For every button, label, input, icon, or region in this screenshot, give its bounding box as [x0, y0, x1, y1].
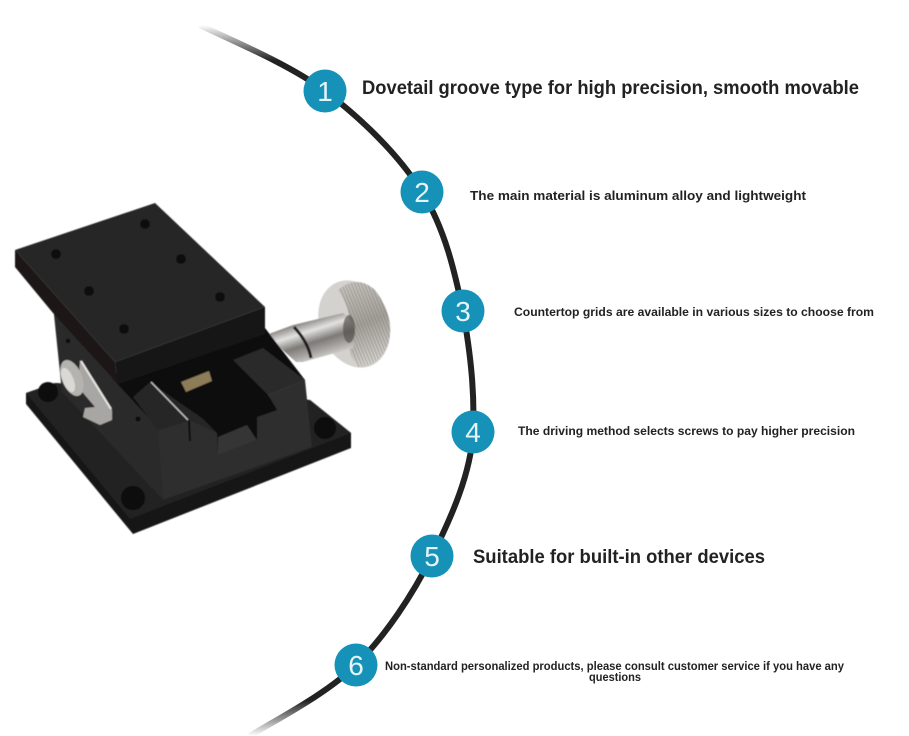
carriage block	[53, 305, 312, 500]
feature 1 text: Dovetail groove type for high precision, smooth movable	[362, 78, 859, 99]
marker 6	[334, 644, 378, 686]
left side face	[53, 305, 163, 500]
spring clip and screw	[56, 357, 112, 425]
top plate	[15, 203, 265, 384]
base plate	[26, 382, 351, 534]
marker 1: 1	[317, 76, 333, 107]
feature 6 text: Non-standard personalized products, please consult customer service if you have any	[385, 661, 845, 673]
marker 4	[452, 410, 494, 454]
marker 2	[400, 170, 444, 214]
marker 3	[442, 290, 484, 332]
marker 1	[304, 70, 346, 112]
marker 3: 3	[455, 296, 471, 327]
marker 2: 2	[414, 177, 430, 208]
left rail top	[133, 382, 217, 433]
adjustment knob and shaft	[266, 270, 402, 378]
feature 6 text	[385, 661, 845, 684]
slot	[232, 360, 277, 417]
curved timeline line	[200, 25, 473, 736]
feature 4 text: The driving method selects screws to pay higher precision	[518, 424, 855, 438]
feature 6 text: questions	[589, 672, 641, 684]
marker 5: 5	[424, 541, 440, 572]
channel floor	[218, 425, 257, 455]
feature 3 text: Countertop grids are available in various sizes to choose from	[514, 305, 874, 319]
dark interior	[112, 328, 305, 455]
feature 2 text: The main material is aluminum alloy and lightweight	[470, 189, 807, 203]
front face	[158, 380, 312, 500]
brass tab	[181, 371, 212, 392]
marker 6: 6	[348, 650, 364, 681]
product photo: dovetail slide stage	[15, 203, 402, 534]
marker 5	[410, 534, 454, 578]
feature 5 text: Suitable for built-in other devices	[473, 547, 765, 568]
right rail top	[233, 348, 305, 395]
marker 4: 4	[465, 417, 481, 448]
